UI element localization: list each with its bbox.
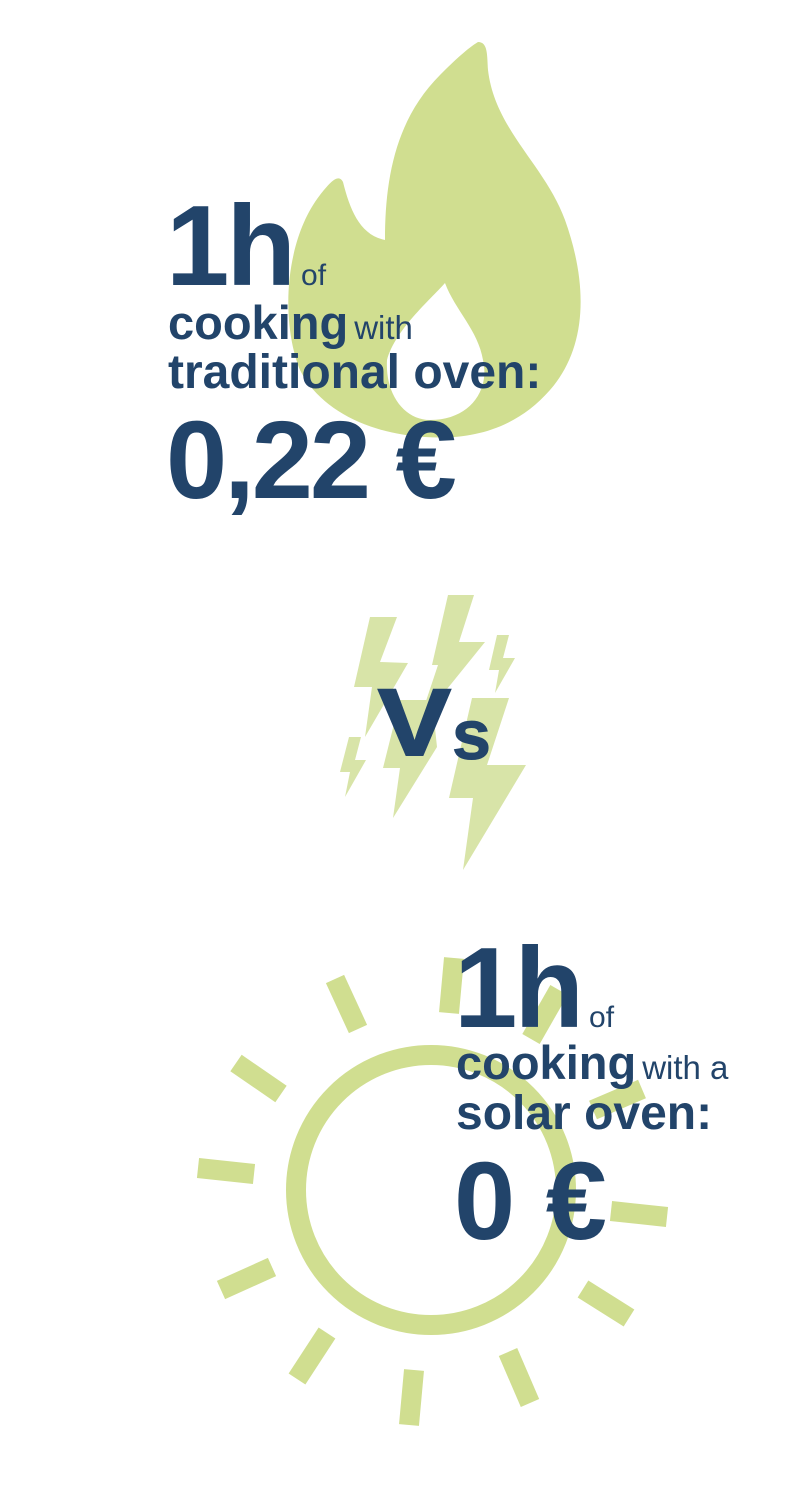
heading: Vs: V	[378, 670, 451, 776]
heading: Vs: s	[452, 696, 491, 774]
text: solar oven: solar oven:	[456, 1087, 712, 1140]
number: 0 €: 0 €	[454, 1140, 607, 1263]
text: cooking with a: cookingwith a	[456, 1036, 728, 1089]
heading: 1h of: 1h of	[166, 183, 326, 310]
number: 0,22 €: 0,22 €	[166, 399, 454, 522]
heading: Vs	[377, 670, 491, 776]
heading: 1h of: 1h of	[454, 925, 614, 1052]
text: traditional oven: traditional oven:	[168, 346, 541, 399]
text block: traditional oven	[166, 183, 541, 522]
text block: solar oven	[454, 925, 728, 1263]
text: cooking with: cookingwith	[168, 296, 413, 349]
